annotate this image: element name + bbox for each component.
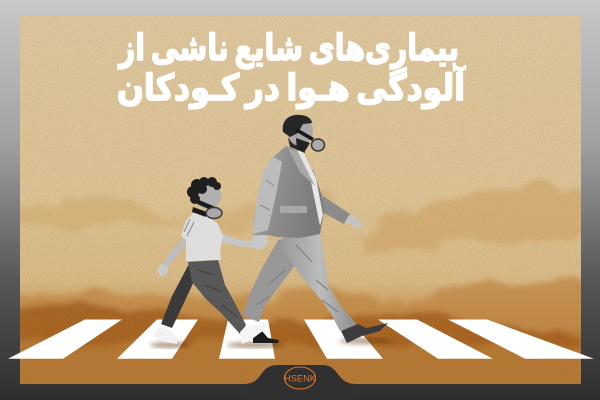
title line 1: بیماری‌های شایع ناشی از bbox=[117, 28, 459, 69]
logo text: HSENK bbox=[284, 374, 317, 384]
man hair bbox=[283, 115, 312, 137]
man far hand bbox=[345, 215, 362, 229]
child jeans folds bbox=[198, 270, 238, 318]
title line 2: آلودگی هـوا در کـودکان bbox=[117, 65, 466, 109]
man back shoe bbox=[253, 331, 279, 343]
bottom logo tab bbox=[244, 365, 356, 400]
child near arm bbox=[162, 238, 187, 268]
child mask strap bbox=[192, 200, 218, 217]
child far arm bbox=[218, 233, 254, 248]
child back shoe bbox=[153, 327, 177, 344]
man sleeve fold bbox=[260, 180, 274, 210]
child head bbox=[195, 181, 221, 209]
ground shadows bbox=[150, 338, 391, 348]
man near sleeve bbox=[253, 156, 282, 234]
joined hands bbox=[251, 235, 268, 250]
man back leg bbox=[243, 238, 305, 322]
man pocket bbox=[280, 206, 307, 213]
man front shoe bbox=[341, 323, 388, 343]
man beard bbox=[296, 138, 310, 151]
man lapel bbox=[288, 148, 315, 186]
child hand bbox=[157, 264, 168, 277]
child front shoe bbox=[240, 321, 268, 344]
child sleeve stripes bbox=[184, 219, 194, 236]
title bbox=[117, 28, 466, 109]
logo ring bbox=[284, 367, 316, 389]
man shirt front bbox=[297, 150, 323, 226]
child shirt bbox=[181, 210, 223, 261]
man gas mask bbox=[312, 139, 324, 151]
child far leg bbox=[161, 262, 200, 328]
child gas mask bbox=[206, 208, 222, 218]
man far arm bbox=[322, 196, 350, 224]
crosswalk stripes bbox=[8, 320, 594, 359]
man neck bbox=[288, 138, 305, 153]
man jacket bbox=[253, 146, 324, 238]
man figure bbox=[243, 115, 388, 343]
man head bbox=[287, 116, 313, 146]
man front leg bbox=[282, 234, 358, 331]
child curly hair bbox=[187, 177, 221, 204]
child near leg bbox=[188, 260, 246, 334]
man mask strap bbox=[295, 128, 314, 141]
dark tab shape bbox=[244, 365, 356, 400]
child figure bbox=[153, 177, 268, 344]
man trouser folds bbox=[256, 245, 338, 312]
